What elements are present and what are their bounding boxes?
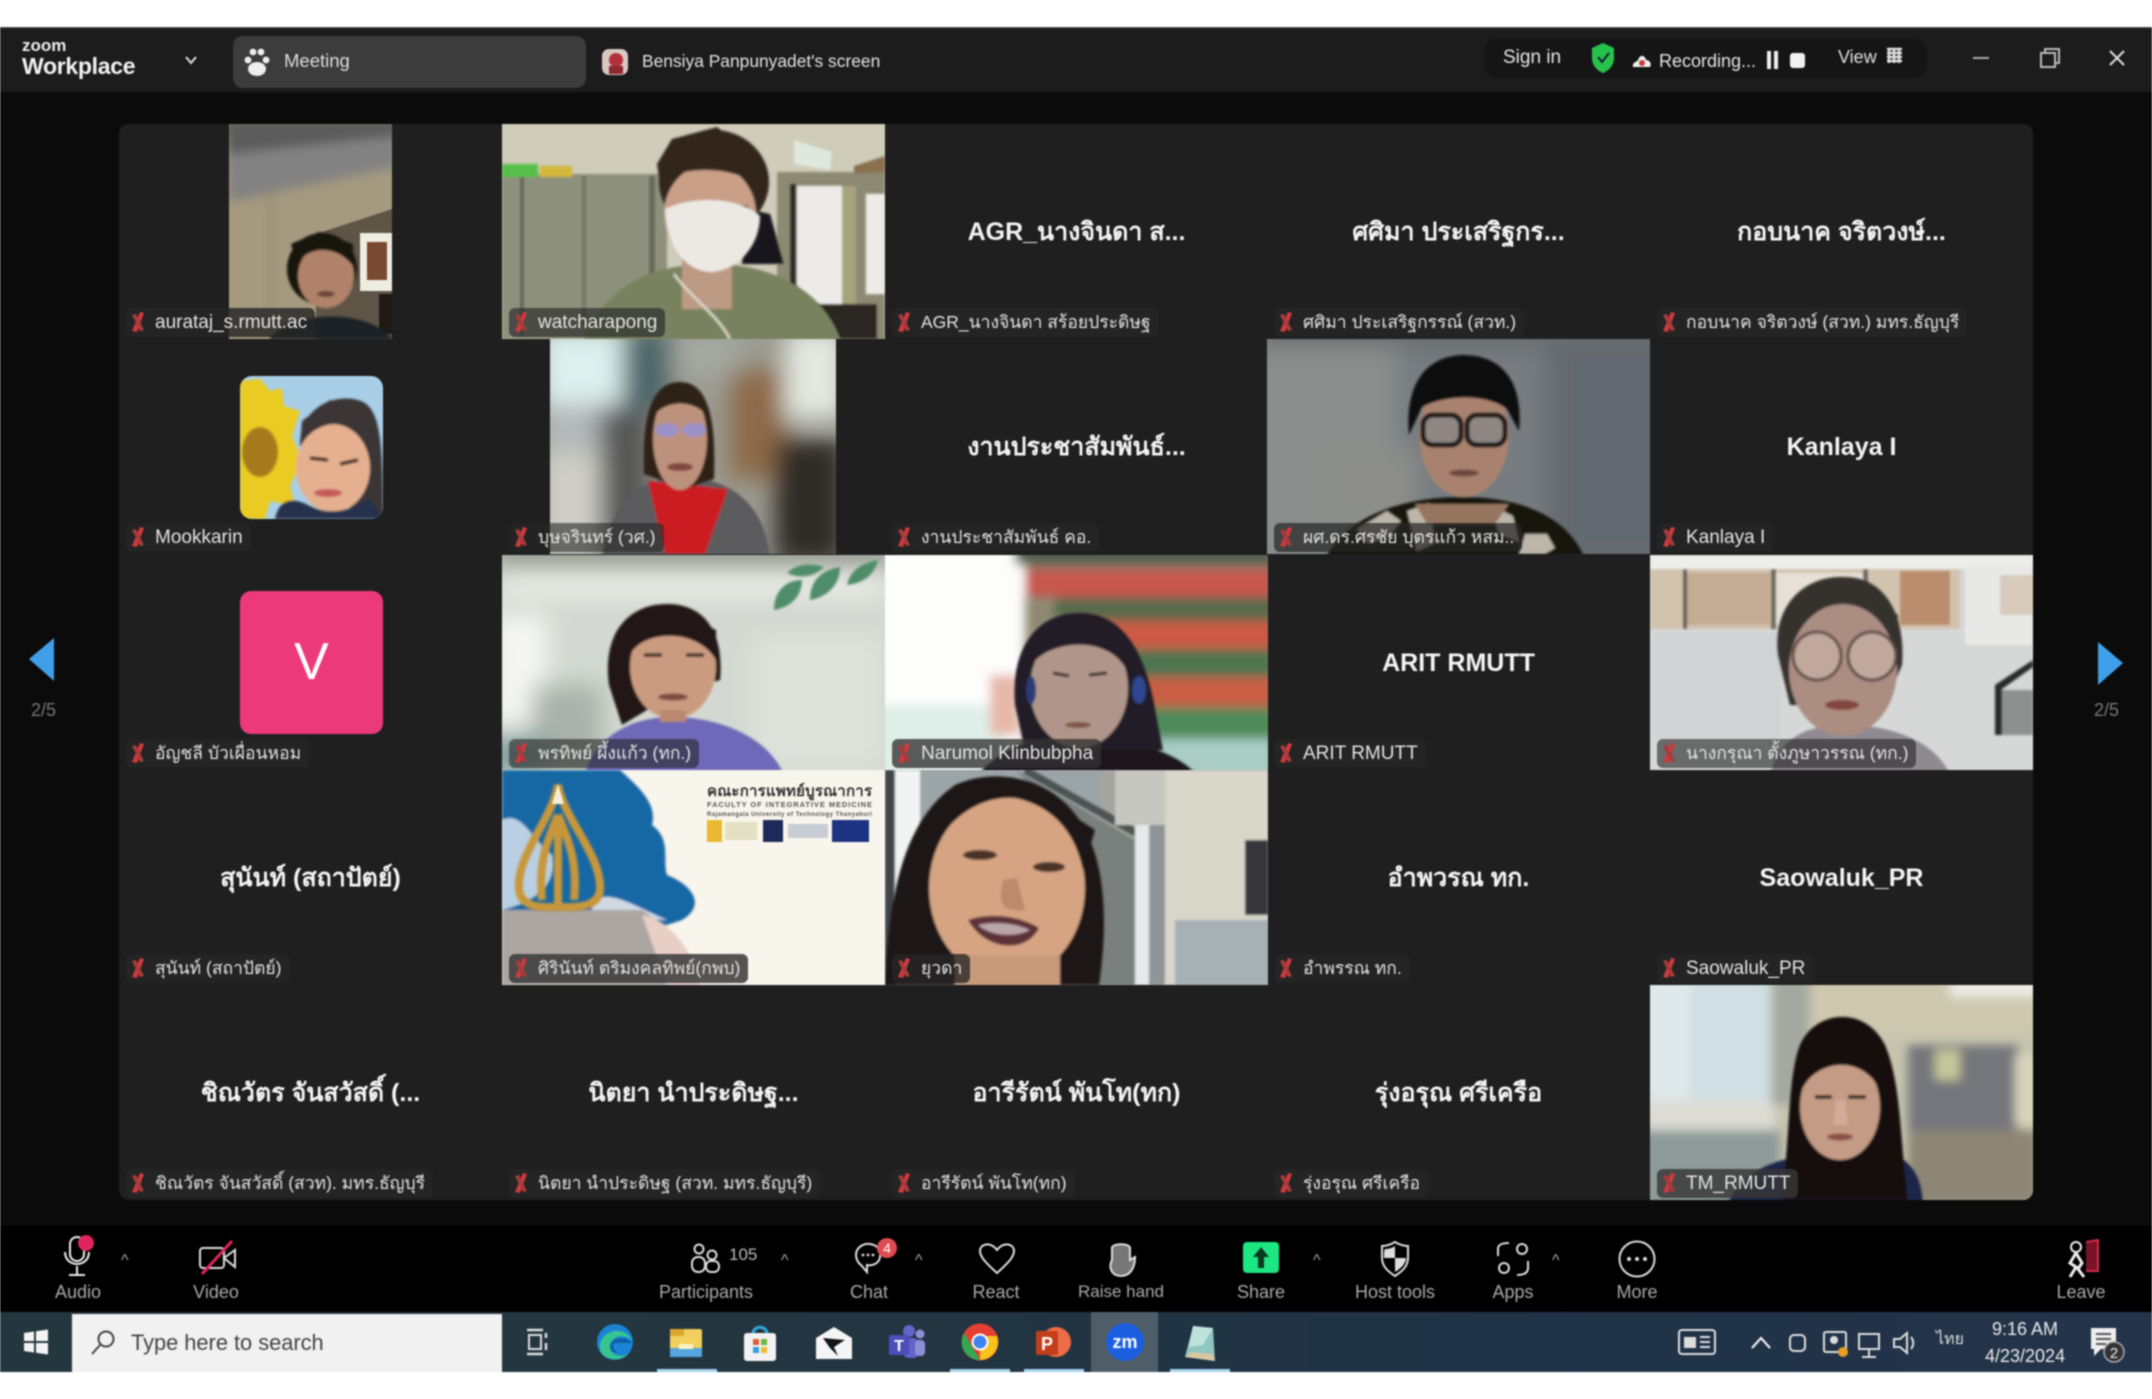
name tag: ARIT RMUTT (1303, 743, 1418, 764)
name tag (126, 523, 251, 552)
name tag (1274, 308, 1524, 337)
text: participant count: 105 (729, 1245, 757, 1264)
text: left page number: 2/5 (31, 700, 56, 720)
logo: zoom Workplace (21, 36, 136, 80)
video: Narumol (884, 554, 1269, 771)
text: Participants: Participants (659, 1282, 753, 1302)
display name: ศศิมา ประเสริฐกร... (1352, 218, 1565, 246)
slide: Faculty of Integrative Medicine (501, 769, 886, 986)
search box (72, 1314, 502, 1372)
underline: chrome (950, 1369, 1010, 1372)
name tag (1274, 523, 1522, 552)
text: Host tools: Host tools (1355, 1282, 1435, 1302)
name tag (892, 1169, 1075, 1198)
name tag: aurataj_s.rmutt.ac (155, 312, 307, 333)
name tag: รุ่งอรุณ ศรีเครือ (1303, 1173, 1420, 1193)
name tag (1657, 308, 1967, 337)
tile: Karuna (1649, 554, 2034, 771)
tile: Yuwada (884, 769, 1269, 986)
icon: raise hand (1104, 1240, 1138, 1278)
slide heading: FACULTY OF INTEGRATIVE MEDICINE (707, 800, 872, 809)
tile: Narumol (884, 554, 1269, 771)
name tag: ยุวดา (921, 958, 962, 978)
name tag: ชิณวัตร จันสวัสดิ์ (สวท). มทร.ธัญบุรี (155, 1173, 425, 1193)
slide heading (707, 782, 873, 818)
name tag (1274, 739, 1426, 768)
icon: file explorer (669, 1326, 703, 1360)
name tag: อำพรรณ ทก. (1303, 958, 1402, 978)
name tag: Saowaluk_PR (1686, 958, 1805, 979)
name tag (892, 523, 1099, 552)
name tag: กอบนาค จริตวงษ์ (สวท.) มทร.ธัญบุรี (1686, 312, 1959, 332)
icon: shield (1591, 42, 1615, 74)
icon: zoom: zm (1112, 1332, 1138, 1352)
caret: ^ (915, 1252, 923, 1269)
window title bar (0, 27, 2152, 92)
name tag: AGR_นางจินดา สร้อยประดิษฐ (921, 312, 1151, 332)
icon: store (742, 1324, 778, 1362)
tab: Meeting (233, 36, 586, 88)
tile: Anchalee (131, 590, 384, 764)
icon: notifications: 2 (2110, 1345, 2118, 1362)
icon: teams (887, 1324, 927, 1362)
tile: Porntip (501, 554, 886, 771)
icon: grid view (1886, 46, 1903, 64)
text: Apps: Apps (1492, 1282, 1534, 1302)
display name: นิตยา นำประดิษฐ... (588, 1079, 799, 1107)
text: Share: Share (1237, 1282, 1285, 1302)
window controls (1972, 47, 2126, 69)
icon: news (1678, 1329, 1716, 1355)
text: Audio: Audio (55, 1282, 101, 1302)
name tag: บุษจรินทร์ (วศ.) (538, 527, 656, 547)
underline: ppt (1024, 1369, 1084, 1372)
tab: shared screen (601, 48, 880, 76)
icon: apps (1495, 1240, 1533, 1278)
icon: cloud recording (1632, 54, 1652, 68)
name tag (1657, 523, 1773, 552)
name tag (126, 739, 309, 768)
caret: ^ (121, 1252, 129, 1269)
underline: explorer (657, 1369, 717, 1372)
tile: PR (897, 432, 1186, 548)
name tag (1657, 739, 1916, 768)
icon: glass app (1183, 1325, 1217, 1363)
caret: ^ (1552, 1252, 1560, 1269)
icon: stop (1789, 52, 1806, 69)
caret: ^ (1313, 1252, 1321, 1269)
name tag (509, 523, 664, 552)
name tag (892, 954, 970, 983)
name tag: Narumol Klinbubpha (921, 743, 1093, 764)
name tag (509, 308, 665, 337)
display name: AGR_นางจินดา ส... (968, 218, 1185, 246)
status group: Sign in (1503, 47, 1561, 68)
icon: leave (2062, 1239, 2102, 1279)
tile: Sunan (131, 862, 401, 980)
tile: Areerat (885, 985, 1268, 1200)
icon: mail (815, 1326, 853, 1360)
icon: chrome (961, 1323, 999, 1361)
arrow: next page (2097, 642, 2124, 686)
name tag (509, 739, 699, 768)
tile: ARIT (1279, 649, 1536, 764)
video: Karuna (1649, 554, 2034, 771)
video: Porntip (501, 554, 886, 771)
tile: aurataj (131, 123, 393, 340)
text: date: 4/23/2024 (1985, 1346, 2065, 1366)
display name: อารีรัตน์ พันโท(ทก) (973, 1079, 1180, 1107)
icon: powerpoint: P (1041, 1334, 1053, 1354)
tile: Amphan (1279, 864, 1529, 980)
icon: share (1243, 1242, 1279, 1274)
icon: zoom (1105, 1322, 1145, 1362)
text: Leave: Leave (2056, 1282, 2106, 1302)
system tray (1750, 1326, 1930, 1360)
name tag: ศิรินันท์ ตริมงคลทิพย์(กพบ) (538, 958, 740, 978)
tile: Saowaluk (1650, 770, 2033, 985)
icon: participants (690, 1243, 722, 1275)
name tag (509, 954, 748, 983)
name tag (126, 954, 290, 983)
name tag: งานประชาสัมพันธ์ คอ. (921, 527, 1091, 547)
icon: avatar (601, 48, 629, 76)
name tag: สุนันท์ (สถาปัตย์) (155, 958, 282, 978)
video: Yuwada (884, 769, 1269, 986)
name tag: TM_RMUTT (1686, 1173, 1790, 1194)
icon: heart (978, 1241, 1016, 1275)
name tag (126, 308, 315, 337)
icon: pause (1766, 50, 1779, 70)
video: Sornchai (1266, 338, 1651, 555)
icon: chat with badge: 4 (883, 1240, 891, 1256)
display name: กอบนาค จริตวงษ์... (1737, 218, 1946, 246)
tab: shared screen: Bensiya Panpunyadet's screen (642, 51, 880, 71)
icon: edge (596, 1323, 634, 1361)
name tag: อัญชลี บัวเผื่อนหอม (155, 743, 301, 763)
name tag (126, 1169, 433, 1198)
windows taskbar (0, 1312, 2152, 1372)
tile: Chinawat (119, 985, 502, 1200)
name tag (509, 1169, 820, 1198)
panel: gallery grid (119, 124, 2033, 1200)
tile: Kobnak (1662, 216, 1960, 334)
display name: สุนันท์ (สถาปัตย์) (220, 864, 401, 892)
tile: Sasima (1279, 218, 1565, 334)
tile: TM_RMUTT (1650, 985, 2033, 1200)
text: time: 9:16 AM (1992, 1319, 2058, 1339)
display name: ARIT RMUTT (1382, 649, 1535, 677)
name tag: Mookkarin (155, 527, 243, 548)
search box: Type here to search (131, 1330, 324, 1355)
display name: Kanlaya I (1787, 433, 1896, 461)
icon: windows logo (23, 1329, 49, 1355)
logo: zoom Workplace: Workplace (22, 53, 135, 79)
text: Video: Video (193, 1282, 239, 1302)
display name: Saowaluk_PR (1760, 864, 1923, 892)
text: Raise hand: Raise hand (1078, 1282, 1164, 1301)
name tag (1657, 1169, 1798, 1198)
video: aurataj (228, 123, 393, 340)
logo: zoom Workplace: zoom (22, 36, 66, 55)
tile: Sornchai (1266, 338, 1651, 555)
avatar: V: V (294, 633, 329, 691)
name tag: อารีรัตน์ พันโท(ทก) (921, 1173, 1067, 1193)
icon: teams: T (894, 1338, 904, 1355)
tile: Kanlaya (1662, 433, 1896, 548)
slide heading: Rajamangala University of Technology Thanyaburi (707, 812, 872, 818)
tile: AGR (897, 218, 1185, 334)
icon: magnifier (89, 1329, 117, 1357)
icon: task view (525, 1328, 551, 1356)
icon: host tools shield (1380, 1241, 1410, 1277)
arrow: previous page (28, 638, 55, 682)
name tag (1274, 1169, 1428, 1198)
name tag: ผศ.ดร.ศรชัย บุตรแก้ว หสม.. (1303, 527, 1514, 547)
name tag: นิตยา นำประดิษฐ (สวท. มทร.ธัญบุรี) (538, 1173, 812, 1193)
text: React: React (972, 1282, 1020, 1302)
avatar: V (240, 591, 383, 734)
name tag (1657, 954, 1813, 983)
display name: ชิณวัตร จันสวัสดิ์ (... (201, 1079, 420, 1107)
display name: งานประชาสัมพันธ์... (967, 433, 1186, 461)
display name: รุ่งอรุณ ศรีเครือ (1375, 1079, 1542, 1107)
tile: Mookkarin (131, 375, 384, 548)
status group: View (1838, 47, 1877, 67)
name tag (892, 739, 1101, 768)
icon: chevron (184, 56, 198, 65)
icon: video off (198, 1240, 238, 1276)
video: Butjarin (549, 338, 837, 555)
tile: watcharapong (501, 123, 886, 340)
text: right page number: 2/5 (2094, 700, 2119, 720)
name tag: ศศิมา ประเสริฐกรรณ์ (สวท.) (1303, 312, 1516, 332)
video: watcharapong (501, 123, 886, 340)
name tag: watcharapong (538, 312, 657, 333)
icon: more (1618, 1240, 1656, 1278)
icon: microphone (64, 1234, 98, 1280)
name tag: นางกรุณา ตั้งภูษาวรรณ (ทก.) (1686, 743, 1908, 763)
icon: notifications (2090, 1327, 2130, 1363)
status group (1484, 39, 1927, 78)
tile: Rungarun (1267, 985, 1650, 1200)
display name: อำพวรณ ทก. (1388, 864, 1529, 892)
tile: Butjarin (514, 338, 837, 555)
name tag: พรทิพย์ ผึ้งแก้ว (ทก.) (538, 743, 691, 763)
icon: powerpoint (1035, 1325, 1071, 1361)
tab: Meeting: Meeting (284, 50, 350, 71)
name tag (892, 308, 1159, 337)
name tag (1274, 954, 1410, 983)
icon: paw (244, 48, 270, 77)
underline: glass app (1170, 1369, 1230, 1372)
avatar: Mookkarin (239, 375, 384, 520)
text: More: More (1616, 1282, 1658, 1302)
icon: chat with badge (850, 1235, 900, 1279)
caret: ^ (781, 1252, 789, 1269)
active app: zoom (1091, 1312, 1158, 1372)
video: TM_RMUTT (1650, 985, 2033, 1200)
text: Chat: Chat (850, 1282, 888, 1302)
tile: Nitaya (502, 985, 885, 1200)
name tag: Kanlaya I (1686, 527, 1765, 548)
meeting toolbar (0, 1226, 2152, 1312)
tile: Sirinan slide (501, 769, 886, 986)
status group: Recording... (1659, 51, 1756, 71)
text: input language: ไทย (1936, 1331, 1964, 1348)
slide heading: คณะการแพทย์บูรณาการ (707, 782, 873, 801)
